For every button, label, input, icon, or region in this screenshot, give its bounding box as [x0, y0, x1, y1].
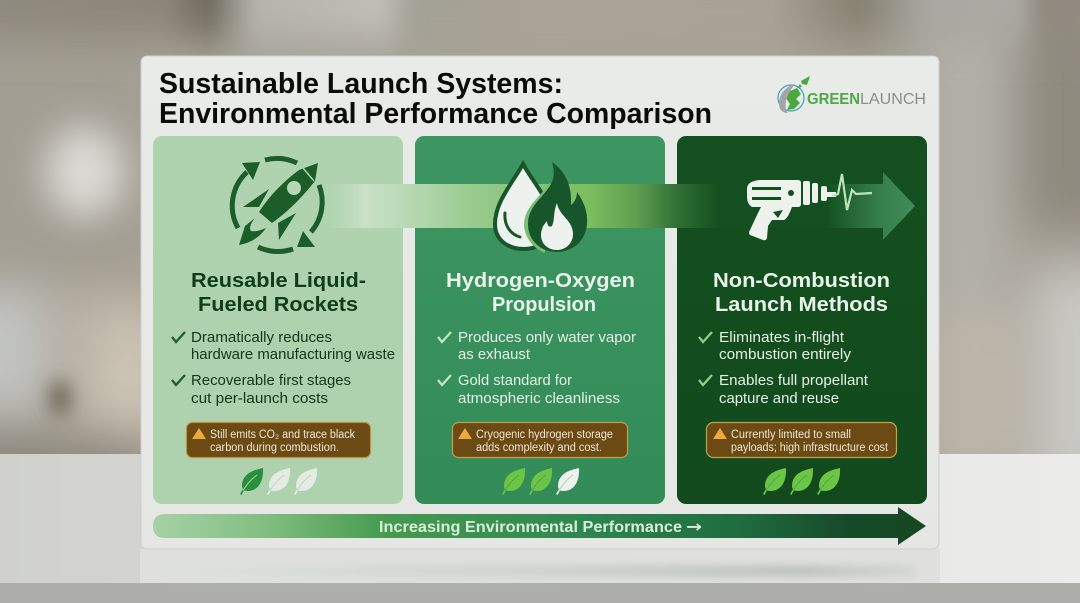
benefits list: non-combustion: Enables full propellant	[719, 372, 869, 389]
heading: reusable rockets: Reusable Liquid-	[191, 270, 366, 292]
rating leaves: one of three	[240, 468, 317, 495]
heading: reusable rockets	[191, 270, 366, 316]
benefits list: non-combustion: capture and reuse	[719, 390, 839, 407]
progress arrow: increasing environmental performance: Increasing Environmental Performance	[379, 519, 682, 536]
benefits list: non-combustion: combustion entirely	[719, 346, 852, 363]
benefits list: reusable rockets	[172, 329, 395, 407]
flow arrow across panels	[322, 172, 915, 240]
callout: hydrogen warning: Cryogenic hydrogen storage	[476, 429, 613, 441]
logo: GreenLaunch: LAUNCH	[860, 91, 926, 108]
board panel	[141, 56, 939, 549]
callout: non-combustion warning: payloads; high infrastructure cost	[731, 442, 889, 454]
panel: non-combustion launch methods	[677, 136, 927, 504]
callout: non-combustion warning: Currently limited to small	[731, 429, 851, 441]
benefits list: non-combustion: Eliminates in-flight	[719, 329, 845, 346]
heading: hydrogen oxygen	[446, 270, 635, 316]
benefits list: hydrogen oxygen: as exhaust	[458, 346, 531, 363]
benefits list: reusable rockets: cut per-launch costs	[191, 390, 328, 407]
callout: non-combustion warning	[706, 422, 896, 458]
logo: GreenLaunch	[778, 76, 926, 113]
board reflection on shelf	[165, 565, 915, 577]
callout: hydrogen warning	[452, 422, 628, 458]
panel: hydrogen-oxygen propulsion	[415, 136, 665, 504]
callout: reusable rockets warning: Still emits CO₂ and trace black	[210, 429, 355, 441]
heading: reusable rockets: Fueled Rockets	[198, 294, 358, 316]
benefits list: hydrogen oxygen: Gold standard for	[458, 372, 572, 389]
heading: hydrogen oxygen: Hydrogen-Oxygen	[446, 270, 635, 292]
benefits list: hydrogen oxygen	[438, 329, 636, 407]
progress arrow: increasing environmental performance: →	[686, 517, 702, 536]
heading: non-combustion: Launch Methods	[715, 294, 888, 316]
title: Sustainable Launch Systems:	[159, 68, 563, 100]
progress arrow: increasing environmental performance	[153, 507, 926, 545]
heading: non-combustion	[713, 270, 890, 316]
rating leaves: two of three	[502, 468, 579, 495]
benefits list: reusable rockets: hardware manufacturing waste	[191, 346, 395, 363]
callout: hydrogen warning: adds complexity and cost.	[476, 442, 602, 454]
benefits list: hydrogen oxygen: Produces only water vapor	[458, 329, 636, 346]
heading: non-combustion: Non-Combustion	[713, 270, 890, 292]
title: Environmental Performance Comparison	[159, 98, 712, 130]
benefits list: non-combustion	[699, 329, 869, 407]
logo: GreenLaunch: GREEN	[807, 91, 860, 108]
rating leaves: three of three	[763, 468, 840, 495]
icon: electromagnetic launcher	[747, 174, 872, 240]
benefits list: hydrogen oxygen: atmospheric cleanliness	[458, 390, 620, 407]
heading: hydrogen oxygen: Propulsion	[492, 294, 596, 316]
icon: reusable rocket	[232, 158, 322, 252]
benefits list: reusable rockets: Dramatically reduces	[191, 329, 332, 346]
callout: reusable rockets warning	[186, 422, 370, 458]
title	[159, 68, 712, 130]
benefits list: reusable rockets: Recoverable first stages	[191, 372, 351, 389]
callout: reusable rockets warning: carbon during combustion.	[210, 442, 339, 454]
icon: water drop and flame	[495, 162, 587, 252]
panel: reusable liquid-fueled rockets	[153, 136, 403, 504]
